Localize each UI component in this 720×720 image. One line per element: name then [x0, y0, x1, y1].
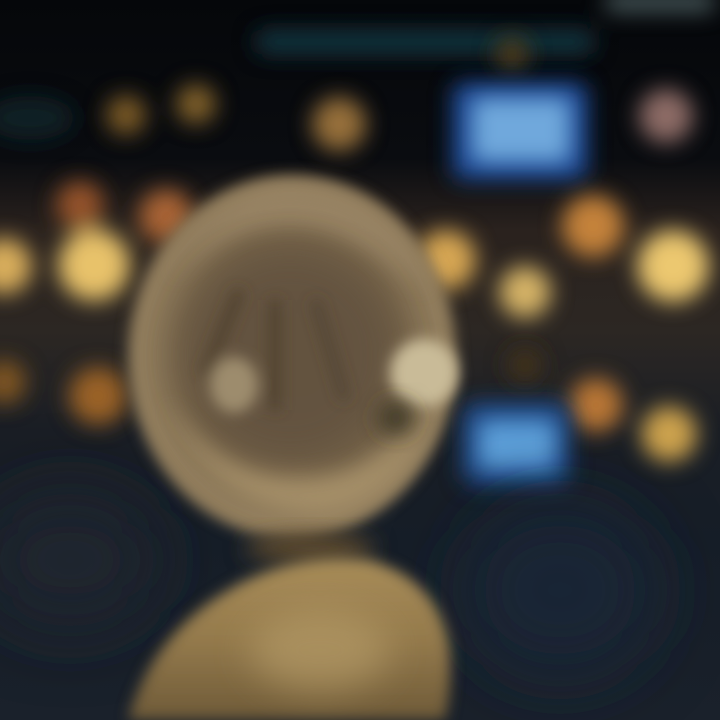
- coin highlight: [390, 339, 458, 407]
- coin lower crescent: [165, 400, 435, 515]
- blue screen, upper: [452, 82, 588, 180]
- coin emblem strokes: [205, 290, 345, 413]
- lower gold mound: [128, 558, 450, 720]
- coin dark spot: [378, 402, 414, 434]
- middle row of bright bokeh lights: [0, 181, 709, 318]
- top teal glow band: [0, 0, 715, 140]
- coin inner shadow: [182, 247, 398, 463]
- mound sheen: [250, 610, 390, 690]
- coin top sheen: [170, 189, 425, 290]
- upper row of dim bokeh lights: [106, 37, 693, 151]
- coin neck shadow: [245, 534, 375, 562]
- large gold coin: [128, 175, 458, 539]
- lower dark blue haze: [0, 490, 660, 680]
- lower row of bokeh lights: [0, 347, 697, 462]
- blue screen, lower: [462, 402, 570, 486]
